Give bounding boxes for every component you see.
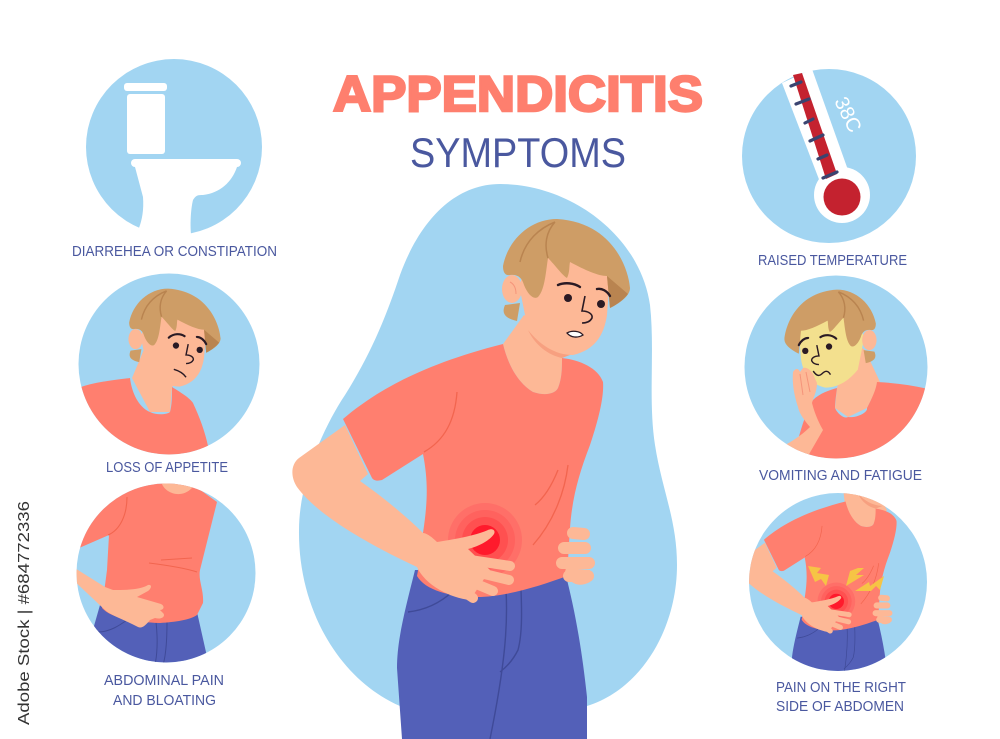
circle: [86, 59, 262, 235]
label: AND BLOATING: [113, 693, 216, 709]
sick boy illustration: [784, 290, 930, 470]
subtitle: SYMPTOMS: [410, 129, 626, 176]
background blob: [299, 184, 677, 706]
boy illustration: [80, 289, 221, 470]
circle: [749, 493, 927, 671]
label: [776, 680, 906, 715]
panel: abdominal pain and bloating: [70, 478, 256, 709]
panel: central figure: [292, 184, 677, 739]
head: [502, 219, 630, 355]
title: APPENDICITIS: [333, 66, 703, 122]
icon: thermometer: [782, 69, 870, 223]
temperature value: 38C: [830, 94, 865, 136]
icon: lightning bolts: [808, 566, 884, 591]
torso and arms: [292, 315, 603, 739]
torso illustration: [749, 493, 897, 671]
circle: [742, 69, 916, 243]
label: [104, 673, 224, 709]
panel: loss of appetite: [78, 274, 260, 476]
circle: [744, 276, 928, 458]
label: RAISED TEMPERATURE: [758, 253, 907, 269]
panel: vomiting and fatigue: [744, 276, 930, 484]
panel: pain on the right side of abdomen: [749, 493, 927, 711]
label: SIDE OF ABDOMEN: [776, 699, 904, 715]
label: DIARREHEA OR CONSTIPATION: [72, 244, 277, 260]
circle: [76, 484, 256, 662]
torso illustration: [76, 484, 217, 662]
label: PAIN ON THE RIGHT: [776, 680, 906, 696]
label: VOMITING AND FATIGUE: [759, 468, 922, 484]
icon: toilet: [124, 83, 241, 240]
stock credit text: Adobe Stock | #684772336: [16, 501, 33, 725]
panel: diarrhea or constipation: [72, 59, 277, 260]
label: LOSS OF APPETITE: [106, 460, 228, 476]
panel: raised temperature: [742, 69, 916, 269]
circle: [78, 274, 260, 454]
label: ABDOMINAL PAIN: [104, 673, 224, 689]
